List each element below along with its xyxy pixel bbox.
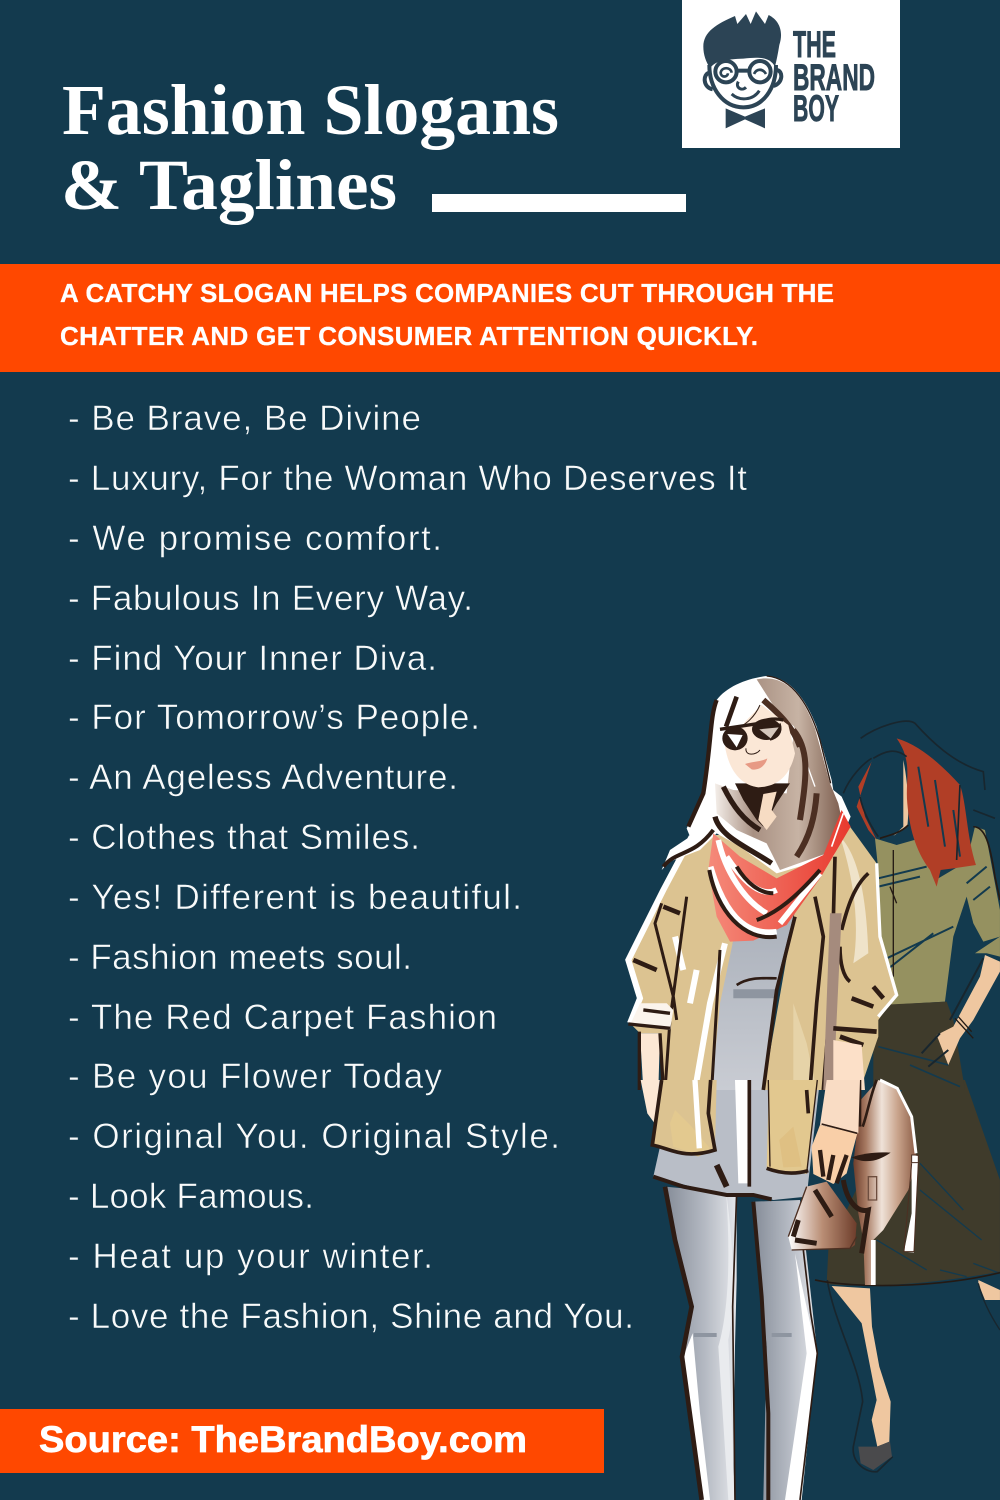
slogan list: - For Tomorrow’s People. bbox=[68, 698, 480, 737]
logo wordmark: THE bbox=[793, 24, 836, 65]
neck bbox=[735, 783, 790, 827]
coat hem, bag and hand bbox=[641, 1080, 918, 1285]
title underline bar bbox=[432, 194, 686, 212]
slogan list: - Find Your Inner Diva. bbox=[68, 639, 437, 678]
orange intro banner: CHATTER AND GET CONSUMER ATTENTION QUICKLY. bbox=[60, 321, 758, 351]
slogan list: - Yes! Different is beautiful. bbox=[68, 878, 522, 917]
title: Fashion Slogans bbox=[62, 70, 559, 150]
slogan list bbox=[68, 399, 747, 1336]
orange intro banner bbox=[0, 264, 1000, 372]
logo: The Brand Boy bbox=[682, 0, 900, 148]
logo wordmark: BOY bbox=[793, 88, 839, 129]
coat details bbox=[675, 937, 725, 1090]
sunglasses bbox=[720, 719, 783, 729]
hair bbox=[662, 676, 851, 873]
source bar bbox=[0, 1409, 604, 1473]
face bbox=[725, 705, 795, 787]
bag strap bbox=[904, 1155, 918, 1253]
logo wordmark bbox=[793, 24, 875, 129]
illustration: two fashion women bbox=[628, 676, 1000, 1500]
slogan list: - Luxury, For the Woman Who Deserves It bbox=[68, 459, 747, 498]
handbag bbox=[853, 1080, 917, 1285]
red hair bbox=[897, 738, 976, 887]
title: & Taglines bbox=[61, 145, 397, 225]
slogan list: - Heat up your winter. bbox=[68, 1237, 433, 1276]
icon: cartoon boy with glasses and bow tie bbox=[703, 11, 781, 128]
scarf bbox=[708, 810, 851, 942]
slogan list: - An Ageless Adventure. bbox=[68, 758, 458, 797]
lips bbox=[745, 758, 767, 770]
slogan list: - Be Brave, Be Divine bbox=[68, 399, 421, 438]
slogan list: - Original You. Original Style. bbox=[68, 1117, 560, 1156]
slogan list: - Fabulous In Every Way. bbox=[68, 579, 473, 618]
front woman with sunglasses, coat and scarf bbox=[628, 676, 918, 1500]
title bbox=[61, 70, 559, 225]
slogan list: - Love the Fashion, Shine and You. bbox=[68, 1297, 634, 1336]
source bar: Source: TheBrandBoy.com bbox=[39, 1419, 527, 1460]
slogan list: - Be you Flower Today bbox=[68, 1057, 442, 1096]
logo wordmark: BRAND bbox=[793, 57, 875, 98]
slogan list: - Clothes that Smiles. bbox=[68, 818, 420, 857]
slogan list: - We promise comfort. bbox=[68, 519, 442, 558]
slogan list: - Fashion meets soul. bbox=[68, 938, 412, 977]
orange intro banner: A CATCHY SLOGAN HELPS COMPANIES CUT THROUGH THE bbox=[60, 278, 834, 308]
legs and shorts bbox=[653, 1080, 820, 1500]
slogan list: - The Red Carpet Fashion bbox=[68, 998, 497, 1037]
coat bbox=[628, 827, 897, 1090]
slogan list: - Look Famous. bbox=[68, 1177, 314, 1216]
back woman with red hair and green blouse bbox=[815, 721, 1000, 1472]
gray top bbox=[712, 910, 795, 1090]
